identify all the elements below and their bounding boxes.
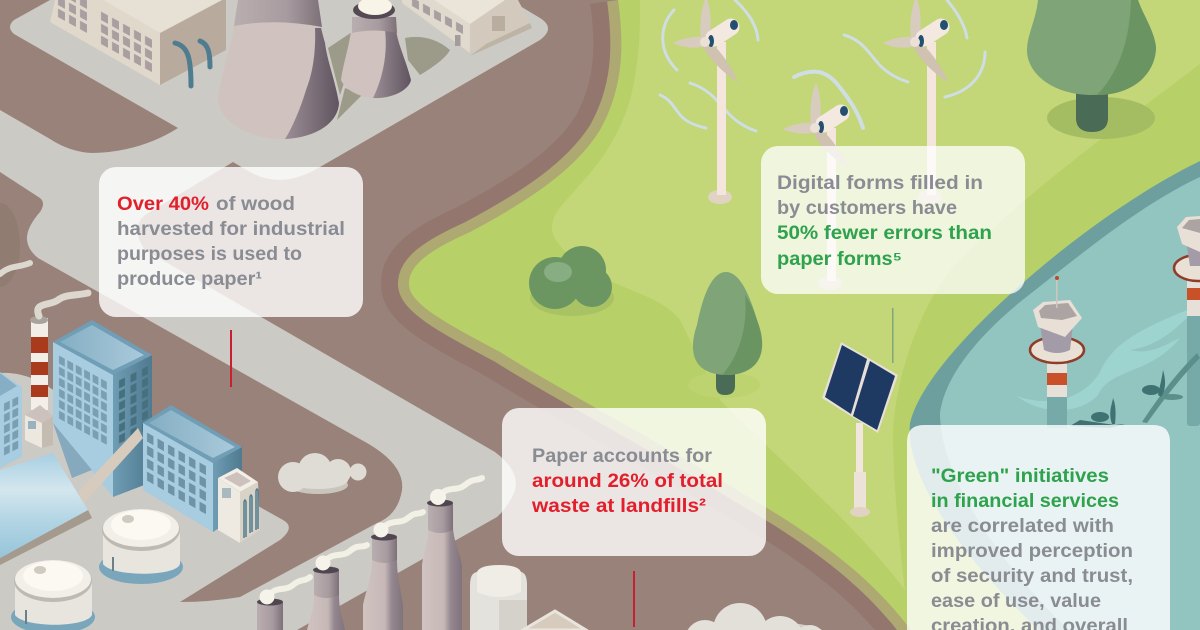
- tower in water with red ring: [1030, 276, 1084, 428]
- water plants: [1070, 353, 1200, 428]
- chimney smoke: [0, 263, 88, 316]
- road network and factory pads: [0, 0, 548, 630]
- lighter green meadow: [552, 0, 1200, 590]
- wind turbine right: [883, 0, 948, 204]
- callout: wood harvested: Over 40%: [117, 194, 209, 215]
- wind turbine middle: [783, 83, 848, 290]
- brown land block: lower left: [0, 172, 402, 602]
- callout: wood harvested: [99, 167, 363, 317]
- callout: green initiatives: in financial services: [931, 491, 1119, 512]
- callout: green initiatives: are correlated with: [931, 516, 1114, 537]
- cloud left: [278, 453, 366, 494]
- callout pointer line red: [633, 571, 635, 627]
- blue reflective pool: [0, 453, 92, 565]
- water swirl highlight: [1017, 305, 1200, 410]
- brown land block: upper left: [0, 0, 178, 153]
- blue office building with service box: [143, 405, 260, 543]
- callout: digital forms: [761, 146, 1025, 294]
- bush: [529, 246, 614, 316]
- callout: landfill waste: [502, 408, 766, 556]
- small utility box: [25, 405, 53, 448]
- callout: wood harvested: purposes is used to: [117, 244, 302, 265]
- chimney row: stack 3: [363, 512, 423, 630]
- callout: wood harvested: harvested for industrial: [117, 219, 345, 240]
- callout: green initiatives: ease of use, value: [931, 591, 1101, 612]
- tall blue office building: [53, 320, 152, 497]
- chimney with red stripes: [30, 316, 48, 410]
- solar panel on pole: [822, 342, 898, 517]
- tree top right: [1027, 0, 1156, 139]
- callout: wood harvested: produce paper¹: [117, 269, 262, 290]
- callout: green initiatives: "Green" initiatives: [931, 466, 1109, 487]
- callout pointer line green: [892, 308, 894, 363]
- chimney row: stack 4: [422, 478, 482, 630]
- callout: green initiatives: improved perception: [931, 541, 1133, 562]
- callout: digital forms: 50% fewer errors than: [777, 223, 992, 244]
- tower in water at right edge: [1174, 216, 1200, 426]
- callout: digital forms: paper forms⁵: [777, 249, 902, 270]
- small cooling tower: [341, 0, 411, 98]
- callout: wood harvested: of wood: [216, 194, 295, 215]
- chimney row: stack 2: [307, 545, 367, 630]
- storage tank upper: [99, 509, 183, 584]
- storage tank lower: [11, 560, 95, 630]
- large cream silo: [470, 565, 527, 630]
- chimney row: stack 1: [257, 577, 310, 630]
- left partial office building: [0, 372, 22, 468]
- shadow of cooling towers: [328, 32, 450, 120]
- factory: top-right beige building: [402, 0, 532, 56]
- callout: landfill waste: Paper accounts for: [532, 446, 713, 467]
- water surface: [940, 177, 1200, 630]
- wind blur swirls: [660, 0, 985, 131]
- conveyor belt: [78, 428, 143, 503]
- dark ground smudge at left: [0, 203, 20, 287]
- callout: landfill waste: waste at landfills²: [531, 496, 706, 517]
- wind turbine left: [673, 0, 738, 204]
- cloud bottom right: [683, 603, 827, 630]
- callout: digital forms: by customers have: [777, 198, 957, 219]
- green land with shore bands: [409, 0, 1200, 630]
- callout: green initiatives: [907, 425, 1170, 630]
- small roof at bottom: [523, 611, 586, 630]
- callout: green initiatives: of security and trust,: [931, 566, 1133, 587]
- callout pointer line red: [230, 330, 232, 387]
- callout: digital forms: Digital forms filled in: [777, 173, 983, 194]
- icon: blue pipes: [175, 41, 210, 86]
- water: river bank: [910, 161, 1200, 630]
- factory: top-left beige building: [50, 0, 226, 85]
- tree middle: [688, 272, 762, 398]
- large cooling tower: [218, 0, 339, 139]
- callout: landfill waste: around 26% of total: [532, 471, 723, 492]
